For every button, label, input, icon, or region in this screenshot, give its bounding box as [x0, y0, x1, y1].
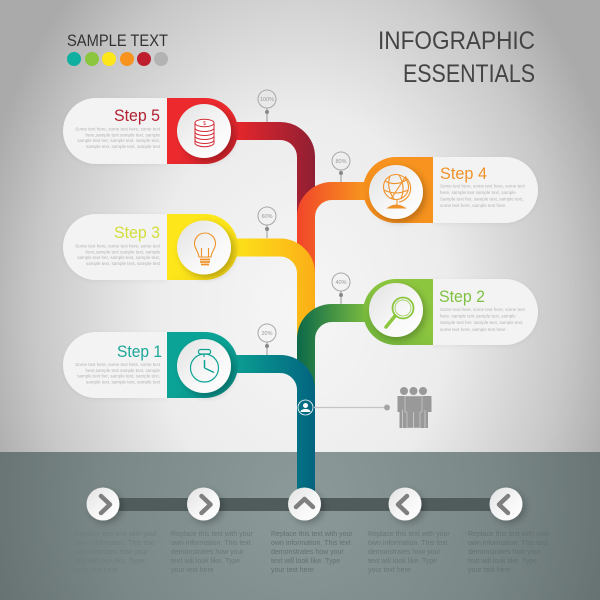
panel: step 3: sample text her, sample text, sample text, [77, 255, 160, 260]
panel: step 1: Step 1 [117, 342, 162, 361]
panel: step 1 [63, 332, 238, 398]
legend: sample text and colour dots: SAMPLE TEXT [67, 31, 168, 50]
text block 3: text will look like. Type [271, 558, 340, 565]
panel: step 2: here, sample text sample text, sample [440, 314, 516, 318]
text block 4: demonstrates how your [368, 549, 441, 556]
icon: coin stack: $ [203, 121, 206, 127]
text block 2: demonstrates how your [171, 549, 244, 556]
text block 2 [171, 531, 253, 574]
text block 3: Replace this text with your [271, 531, 353, 538]
panel: step 5: here,sample text sample text, sample [85, 132, 160, 138]
panel: step 1: sample text her, sample text, sample text, [77, 374, 160, 378]
text block 1 [75, 531, 157, 574]
panel: step 2: Step 2 [439, 287, 485, 306]
text block 3: your text here [271, 567, 314, 574]
panel: step 3 [63, 214, 238, 280]
panel: step 4: here, sample text sample text, sample [440, 190, 516, 195]
text block 2: text will look like. Type [171, 558, 240, 565]
title: INFOGRAPHIC [378, 27, 535, 55]
timeline bar [103, 498, 506, 511]
icon: group of people [398, 387, 432, 428]
text block 1: Replace this text with your [75, 531, 157, 538]
text block 4 [368, 531, 450, 574]
button 4 [388, 488, 422, 520]
panel: step 4: Some text here, some text here, some text [440, 184, 526, 188]
button 2 [187, 488, 220, 520]
text block 1: demonstrates how your [75, 549, 148, 556]
icon: stopwatch [190, 350, 218, 382]
button 5 [490, 488, 522, 520]
step buttons [86, 488, 522, 520]
icon: magnifier [386, 298, 414, 327]
icon: light bulb [194, 233, 216, 264]
tree trunk and branches [230, 131, 370, 495]
panel: step 1: here,sample text sample text, sample [85, 368, 160, 373]
icon: globe [384, 174, 411, 208]
panel: step 3: Step 3 [114, 223, 160, 242]
percent markers: 40% [335, 280, 347, 286]
panel: step 5 [63, 98, 238, 164]
text block 5 [468, 531, 550, 574]
text block 2: your text here [171, 567, 214, 574]
title: ESSENTIALS [403, 60, 535, 88]
legend: sample text and colour dots [67, 31, 168, 66]
text block 5: own information. This text [468, 540, 548, 547]
panel: step 5: Some text here, some text here, some text [75, 126, 161, 132]
panel: step 4: Step 4 [440, 164, 487, 183]
panel: step 4: Sample text her, sample text, sample text, [440, 196, 524, 202]
text block 4: own information. This text [368, 540, 448, 547]
panel: step 4 [363, 157, 538, 223]
panel: step 1: sample text, sample text, sample text [86, 380, 161, 384]
percent markers: 20% [261, 331, 273, 337]
panel: step 5: sample text her, sample text, sample text, [77, 138, 160, 143]
panel: step 2: Some text here, some text here, some text [440, 307, 526, 312]
text block 5: demonstrates how your [468, 549, 541, 556]
background wall [0, 0, 600, 453]
text block 1: your text here [75, 567, 118, 574]
panel: step 1: Some text here, some text here, some text [75, 362, 161, 367]
button 3 [288, 488, 321, 520]
panel: step 2 [363, 279, 538, 345]
percent markers: 100% [260, 97, 274, 103]
button 1 [86, 488, 120, 520]
icon: coin stack [195, 119, 214, 147]
icon: person badge with connector [298, 400, 390, 415]
panel: step 2: some text here, sample text here [440, 327, 506, 332]
text block 1: own information. This text [75, 540, 155, 547]
text block 5: Replace this text with your [468, 531, 550, 538]
panel: step 3: sample text, sample text, sample text [86, 261, 161, 266]
text block 5: text will look like. Type [468, 558, 537, 565]
text block 5: your text here [468, 567, 511, 574]
panel: step 3: Some text here, some text here, some text [75, 244, 161, 248]
text block 2: Replace this text with your [171, 531, 253, 538]
text block 3: own information. This text [271, 540, 351, 547]
panel: step 5: Step 5 [114, 106, 160, 125]
panel: step 5: sample text, sample text, sample text [86, 144, 161, 149]
text block 4: text will look like. Type [368, 558, 437, 565]
text block 4: your text here [368, 567, 411, 574]
panel: step 4: some text here, sample text here [440, 203, 506, 208]
percent markers [258, 90, 350, 355]
percent markers: 80% [335, 159, 347, 165]
floor band [0, 452, 600, 600]
panel: step 3: here,sample text sample text, sample [85, 250, 160, 254]
panel: step 2: Sample text her, sample text, sample text, [440, 320, 524, 325]
percent markers: 60% [261, 214, 273, 220]
text block 2: own information. This text [171, 540, 251, 547]
text block 4: Replace this text with your [368, 531, 450, 538]
text block 1: text will look like. Type [75, 558, 144, 565]
text block 3 [271, 531, 353, 574]
text block 3: demonstrates how your [271, 549, 344, 556]
title [378, 27, 535, 88]
